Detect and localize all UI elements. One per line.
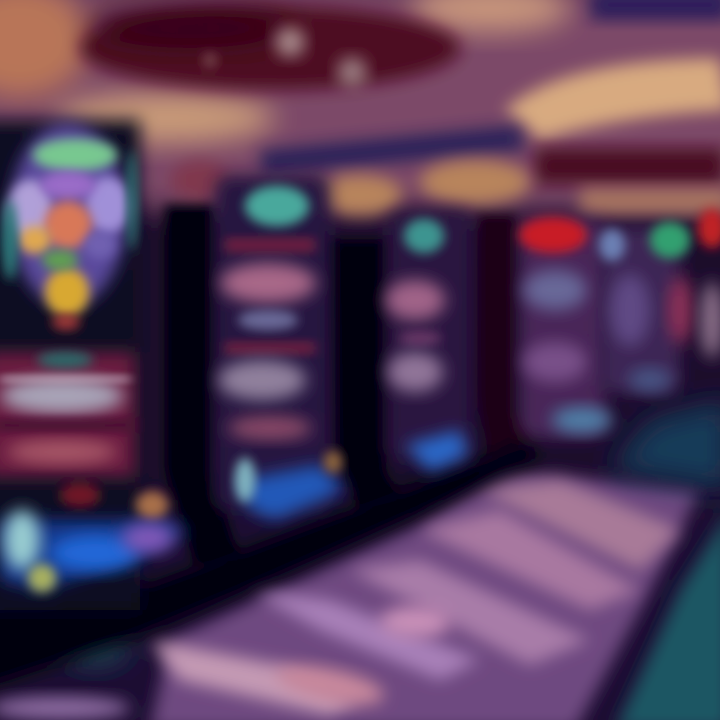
ceiling with dark red canopy and lights bbox=[0, 0, 720, 144]
teal floor area bbox=[61, 400, 720, 720]
right ceiling light band bbox=[505, 58, 720, 214]
machine 1 reels bbox=[0, 352, 135, 477]
blue overhead beam bbox=[170, 125, 530, 215]
slot machine 4 bbox=[519, 217, 612, 438]
slot machine 5 and 6 bbox=[599, 208, 720, 393]
slot machine 2 bbox=[215, 175, 345, 520]
black machine pillars bbox=[0, 205, 540, 690]
slot machine 1 bbox=[0, 120, 190, 610]
slot machine 3 bbox=[385, 210, 472, 472]
machine 1 lit tray bbox=[0, 483, 190, 592]
machine 1 wheel bbox=[2, 123, 138, 330]
floor carpet bbox=[0, 470, 700, 720]
